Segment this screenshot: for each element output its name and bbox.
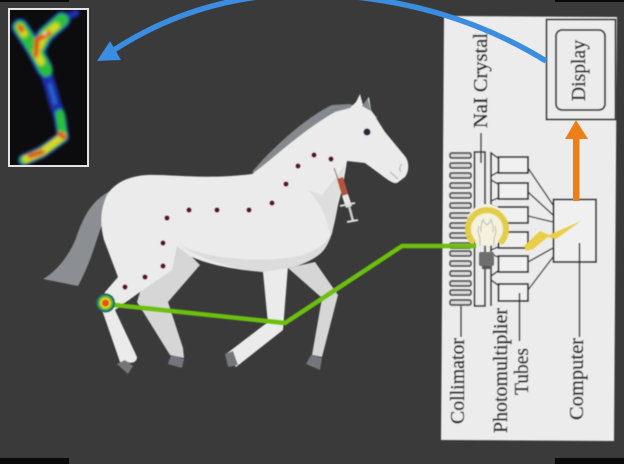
eye <box>363 128 371 136</box>
photomultiplier tubes label: Tubes <box>511 348 533 395</box>
panel: gamma camera diagram <box>441 16 617 441</box>
green signal line <box>105 246 476 323</box>
light guide line <box>490 152 492 306</box>
collimator slits <box>450 153 471 305</box>
NaI crystal bar <box>474 152 485 306</box>
icon: light bulb <box>466 204 508 269</box>
nostril and mouth <box>390 164 402 179</box>
computer label: Computer <box>566 338 588 420</box>
tail <box>43 190 112 286</box>
near front lower leg <box>226 322 283 367</box>
photomultiplier tubes label <box>490 293 533 433</box>
tracer dots <box>122 152 334 290</box>
computer box <box>554 200 596 262</box>
label: NaI Crystal: NaI Crystal <box>470 33 492 128</box>
horse <box>43 94 408 374</box>
orange arrow from computer to display <box>565 120 588 201</box>
hot spot on horse leg <box>96 294 115 312</box>
far hind hoof <box>168 355 184 368</box>
belly shading <box>177 228 334 272</box>
label: Display: Display <box>568 40 590 101</box>
syringe <box>334 168 358 222</box>
neck shading <box>308 165 345 236</box>
ear detail <box>362 98 371 111</box>
body <box>101 94 408 363</box>
icon: lightning bolt <box>524 221 581 251</box>
collimator label: Collimator <box>447 338 469 424</box>
tube couplings and wires <box>491 153 553 290</box>
mane <box>252 104 378 175</box>
photomultiplier tubes label: Photomultiplier <box>490 308 512 433</box>
far front leg <box>288 262 338 357</box>
hooves <box>117 360 133 374</box>
far front hoof <box>306 355 322 370</box>
photomultiplier tubes <box>498 157 528 301</box>
far hind leg <box>137 242 200 358</box>
thermal scan image <box>9 9 88 166</box>
blue arrow from display to scan <box>97 0 546 61</box>
display unit <box>546 20 616 120</box>
